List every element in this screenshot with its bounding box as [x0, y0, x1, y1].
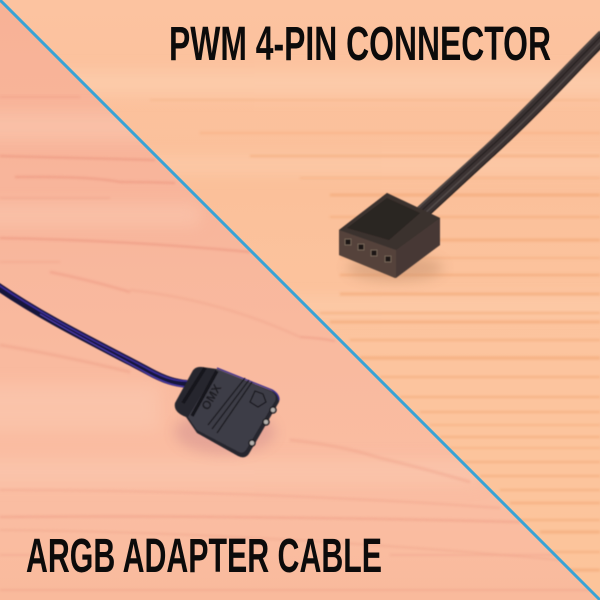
cable: four black wires: [416, 28, 600, 219]
cable: purple wires: [0, 286, 187, 384]
ARGB connector shadow and glow: [174, 418, 276, 456]
PWM connector shadow: [347, 255, 443, 281]
PWM 4-pin cable and connector: [339, 28, 600, 278]
grooves: [183, 368, 252, 433]
four pin holes: [345, 239, 391, 262]
heading: ARGB adapter cable: ARGB ADAPTER CABLE: [26, 530, 382, 583]
OMX logo mark: OMX: [198, 382, 224, 412]
connector body: [175, 367, 279, 457]
arrow mark: [250, 391, 266, 407]
panel: upper-right wood background: [78, 74, 600, 573]
ARGB adapter cable and connector: [0, 284, 279, 457]
three pins: [249, 407, 276, 446]
connector body: [339, 193, 440, 278]
